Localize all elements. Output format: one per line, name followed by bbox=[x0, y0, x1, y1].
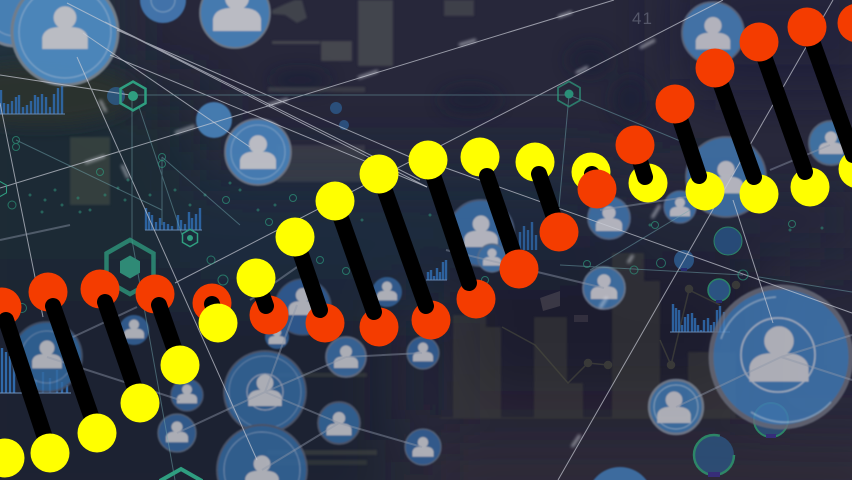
avatar: left lower bbox=[158, 414, 196, 452]
text: faded gauge value: 41 bbox=[632, 9, 653, 28]
avatar: corner partial bbox=[0, 0, 53, 46]
small nodes bbox=[8, 136, 796, 312]
line chart: faded trend bbox=[502, 282, 740, 383]
red ball top right bbox=[838, 4, 852, 42]
base pair 15 bbox=[656, 84, 724, 210]
avatar: top left large bbox=[12, 0, 118, 85]
light streaks on lines bbox=[85, 12, 660, 447]
avatar: bottom centre bbox=[217, 425, 307, 480]
avatar: centre large bbox=[224, 351, 306, 433]
progress ring: upper bbox=[714, 227, 742, 255]
hexagon: top left bbox=[120, 82, 146, 110]
progress ring: under big avatar bbox=[754, 403, 788, 438]
bar chart: small centre bbox=[426, 260, 447, 280]
base pair 16 bbox=[696, 48, 778, 214]
progress ring: small bbox=[674, 250, 694, 271]
bar chart: lower right bbox=[670, 304, 730, 332]
avatar: far right bbox=[809, 121, 852, 165]
icon: dim blue dots bbox=[107, 87, 349, 130]
base pair 2 bbox=[28, 272, 116, 452]
bar chart: bottom left bbox=[0, 348, 71, 393]
avatar: left behind strand bbox=[12, 322, 82, 392]
bar chart: faded olive columns bbox=[440, 253, 752, 418]
base pair 4 bbox=[136, 274, 200, 384]
base pair 11 bbox=[460, 138, 538, 288]
avatar: behind red ball bbox=[265, 325, 289, 349]
base pair 1 bbox=[0, 288, 70, 472]
avatar group: lower bbox=[12, 277, 851, 480]
base pair 7 bbox=[276, 218, 344, 342]
avatar: top right bbox=[682, 2, 744, 64]
scattered data points bbox=[28, 178, 824, 232]
base pair 6 bbox=[236, 258, 288, 334]
avatar: behind strand right bbox=[686, 137, 766, 217]
icon group: progress rings bbox=[674, 227, 788, 477]
base pair 13 bbox=[572, 152, 616, 208]
bar chart: small behind strand bbox=[520, 222, 536, 250]
avatar: under strand bbox=[326, 337, 366, 377]
base pair 14 bbox=[616, 126, 668, 202]
plain blue disc bbox=[196, 102, 232, 138]
hexagon: large left bbox=[106, 240, 154, 294]
avatar: small middle bbox=[478, 244, 506, 272]
hexagon: bottom bbox=[161, 469, 201, 480]
base pair 3 bbox=[80, 270, 160, 422]
avatar: top partial bbox=[140, 0, 186, 23]
avatar: lower right bbox=[649, 380, 703, 434]
avatar: bottom middle bbox=[405, 429, 441, 465]
base pair 5 bbox=[192, 284, 238, 342]
avatar: centre right bbox=[583, 267, 625, 309]
yellow ball bottom left bbox=[0, 438, 24, 478]
avatar: upper left small bbox=[119, 315, 149, 345]
base pair 10 bbox=[408, 140, 496, 318]
base pair 17 bbox=[740, 22, 830, 206]
avatar: small right of centre bbox=[588, 197, 630, 239]
avatar: large right bbox=[711, 287, 851, 427]
panel: faded document blocks bbox=[70, 0, 474, 465]
avatar: behind rungs bbox=[275, 279, 331, 335]
progress ring: lower right bbox=[694, 435, 734, 477]
bar chart: top left bbox=[0, 86, 65, 114]
base pair 8 bbox=[316, 182, 398, 346]
avatar: middle behind strand bbox=[448, 200, 514, 266]
avatar group: upper right bbox=[448, 2, 852, 309]
avatar: centre right small bbox=[318, 402, 360, 444]
hexagon: left edge bbox=[0, 182, 7, 196]
hexagon nodes bbox=[0, 81, 795, 480]
progress ring: mid right bbox=[708, 279, 730, 303]
avatar: top centre bbox=[200, 0, 270, 48]
base pair 9 bbox=[360, 154, 450, 340]
base pair 18 bbox=[788, 8, 852, 188]
bar chart: centre left bbox=[145, 208, 202, 230]
avatar: left small bbox=[171, 379, 203, 411]
avatar: lower centre bbox=[407, 337, 439, 369]
avatar: under strand small bbox=[372, 277, 402, 307]
hexagon: small centre left bbox=[182, 229, 198, 247]
base pair 12 bbox=[516, 142, 578, 252]
avatar: bottom partial bbox=[587, 467, 653, 480]
hexagon: centre top bbox=[558, 81, 580, 107]
avatar group: top left bbox=[0, 0, 291, 185]
avatar: small bbox=[664, 191, 696, 223]
icon: faded laptop bbox=[540, 291, 588, 322]
avatar: upper middle bbox=[225, 119, 291, 185]
